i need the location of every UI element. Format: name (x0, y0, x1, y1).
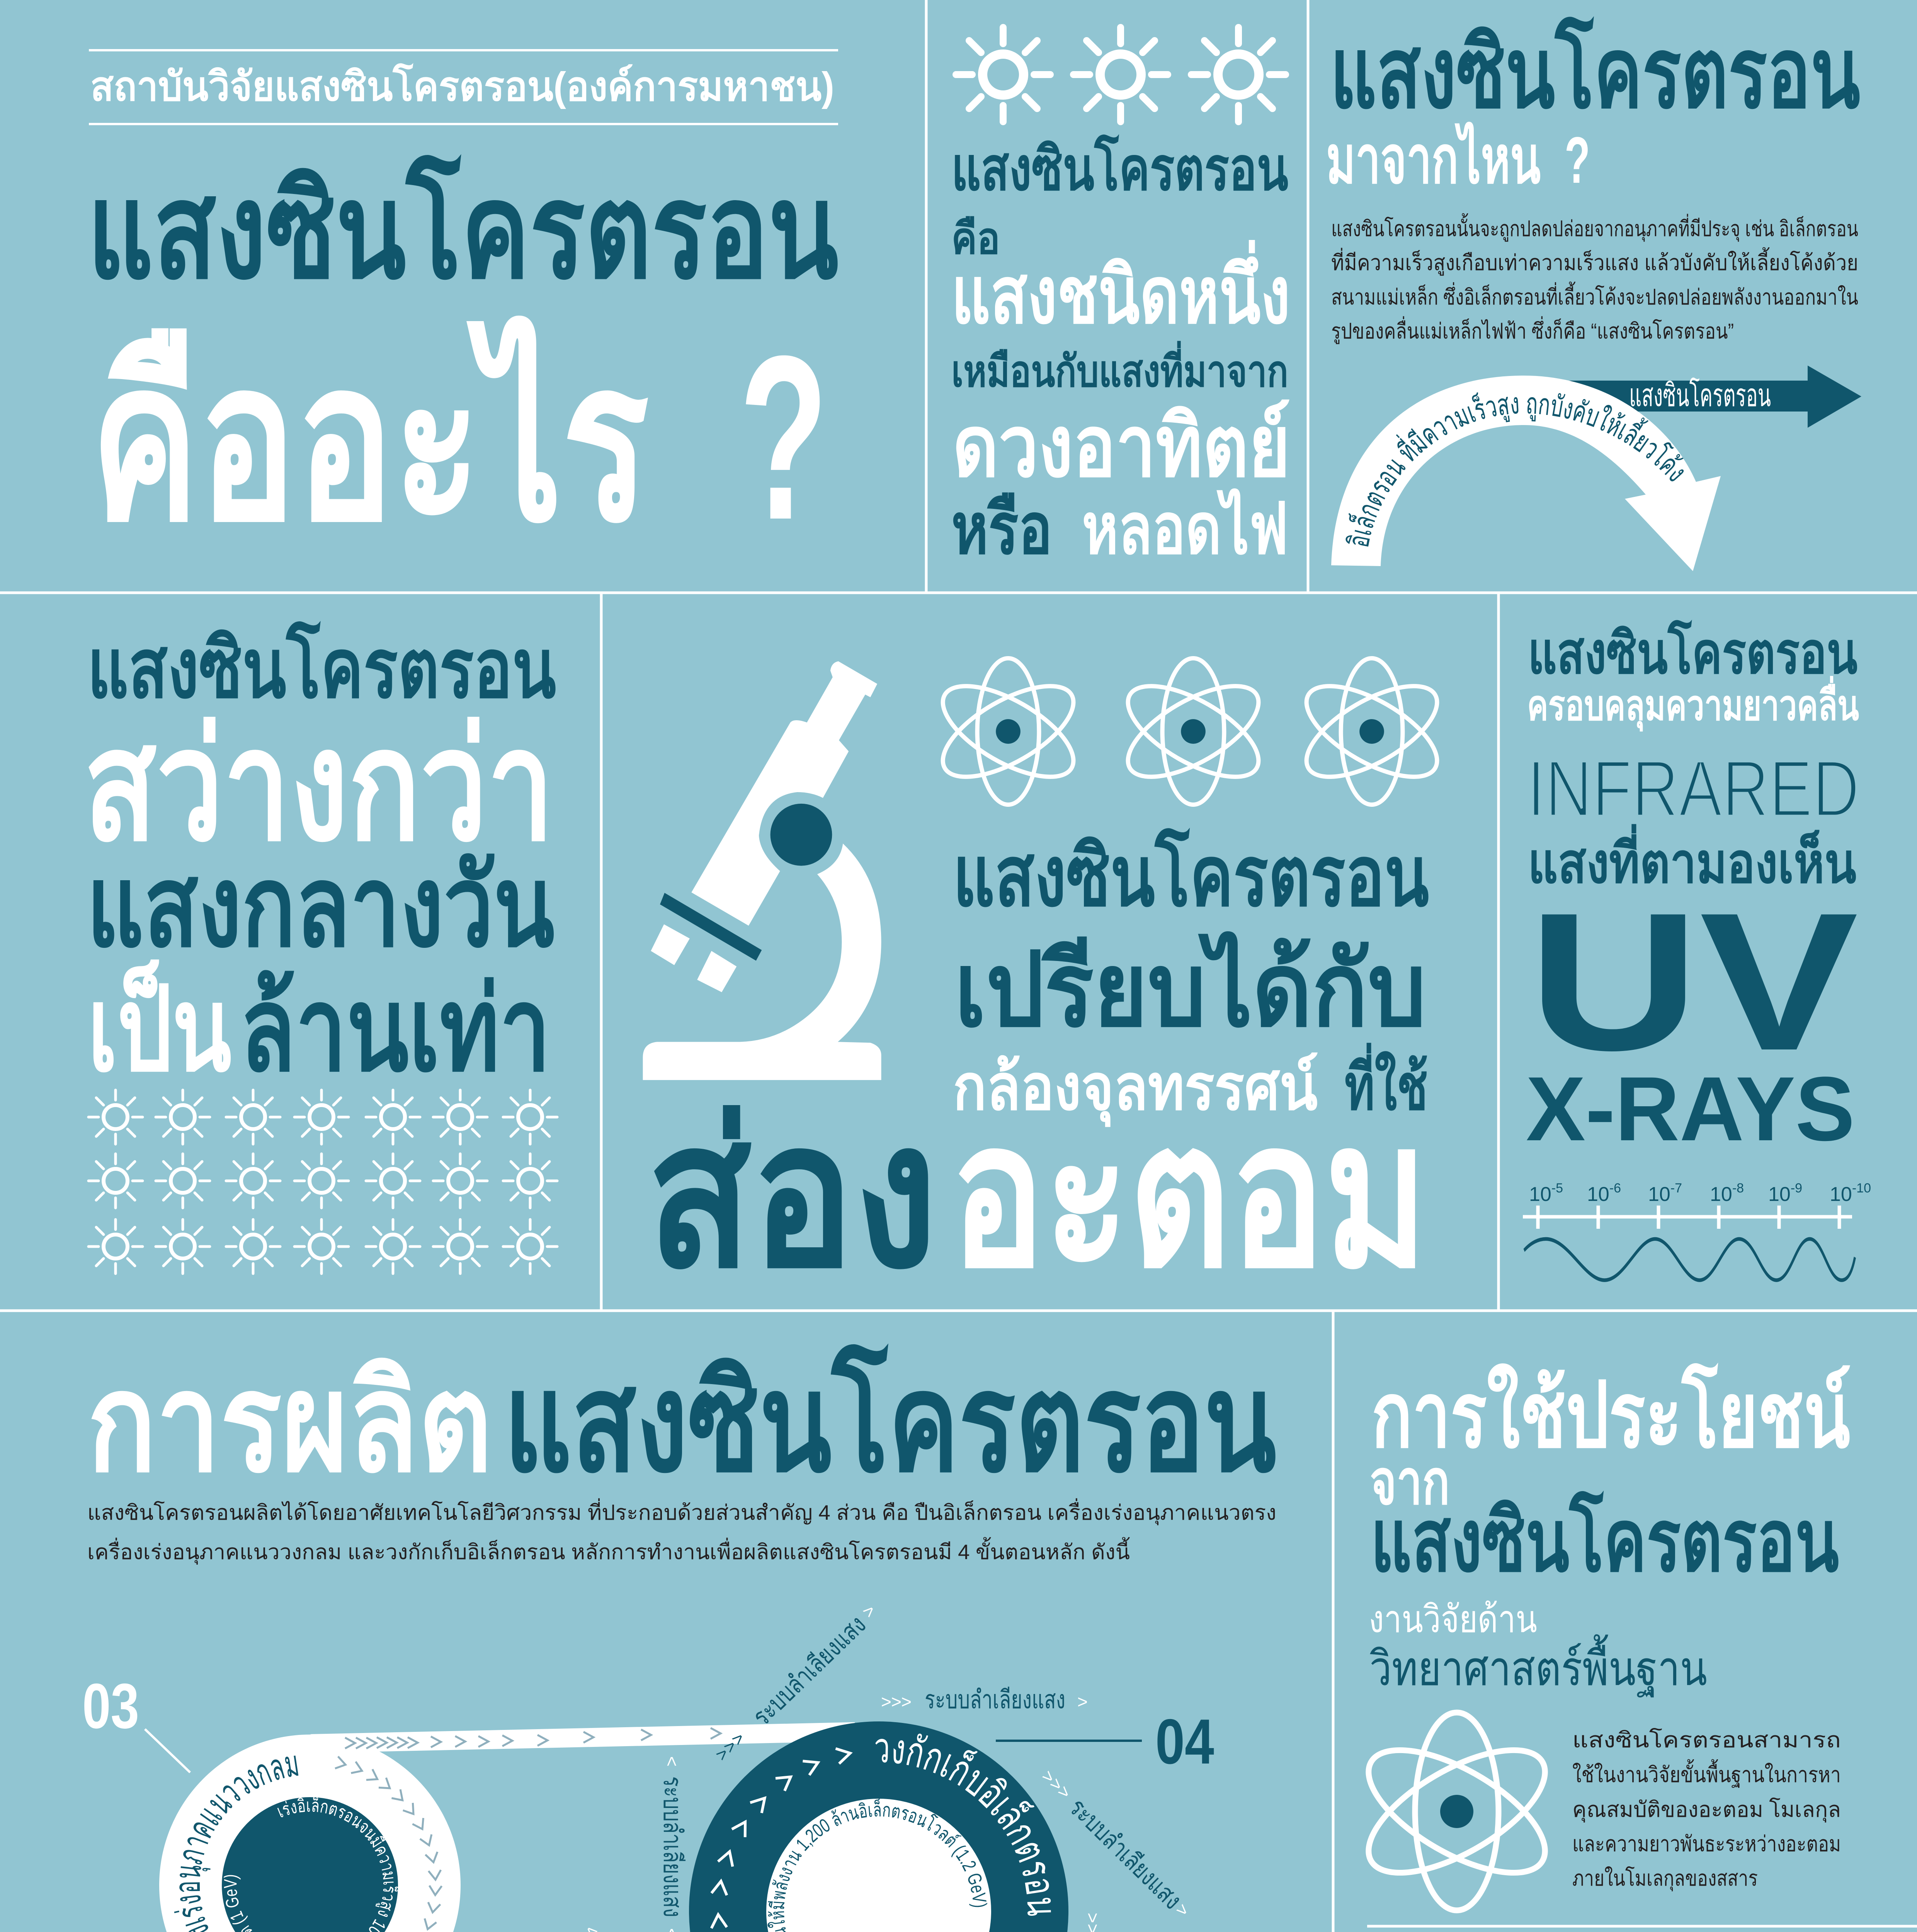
basic science subheading: วิทยาศาสตร์พื้นฐาน (1369, 1634, 1707, 1698)
wave (1524, 1239, 1855, 1280)
definition heading: หรือ (951, 489, 1052, 568)
basic science text: ภายในโมเลกุลของสสาร (1572, 1866, 1758, 1891)
panel: wavelength coverage (1523, 619, 1871, 1280)
wavelength scale labels: -9 (1791, 1181, 1802, 1196)
comparison text: แสงซินโครตรอน (953, 827, 1429, 923)
wavelength scale labels: -5 (1551, 1181, 1563, 1196)
heading lines: ล้านเท่า (240, 964, 551, 1095)
callout 04: 04 (1155, 1706, 1214, 1777)
intro text: แสงซินโครตรอนผลิตได้โดยอาศัยเทคโนโลยีวิศวกรรม ที่ประกอบด้วยส่วนสำคัญ 4 ส่วน คือ ปืนอิเล็กตรอน เครื่องเร่งอนุภาคแนวตรง (87, 1498, 1276, 1526)
title line 2: ? (739, 307, 828, 568)
heading lines: แสงกลางวัน (87, 844, 555, 970)
wavelength scale labels: 10 (1529, 1183, 1551, 1206)
icon: microscope (643, 661, 881, 1080)
section title: การผลิต (87, 1346, 492, 1500)
label: visible light: แสงที่ตามองเห็น (1528, 824, 1856, 895)
comparison text: กล้องจุลทรรศน์ (953, 1052, 1318, 1127)
institute name with rules (89, 50, 838, 124)
intro text (87, 1498, 1276, 1565)
wavelength scale labels (1529, 1181, 1871, 1206)
institute name with rules: สถาบันวิจัยแสงซินโครตรอน(องค์การมหาชน) (90, 63, 834, 109)
beamlines around storage ring: < (662, 1756, 682, 1767)
panel: brighter than daylight (84, 621, 557, 1274)
applications heading (1370, 1362, 1850, 1589)
wavelength scale labels: -8 (1732, 1181, 1744, 1196)
basic science text: แสงซินโครตรอนสามารถ (1572, 1728, 1841, 1752)
definition heading: แสงชนิดหนึ่ง (951, 240, 1290, 340)
panel: main title (87, 50, 839, 568)
beamlines around storage ring: > (1172, 1899, 1194, 1921)
storage ring (689, 1721, 1068, 1932)
comparison text: ที่ใช้ (1345, 1043, 1428, 1123)
basic science text: และความยาวพันธะระหว่างอะตอม (1572, 1832, 1841, 1856)
callout 03 (82, 1670, 190, 1772)
basic science text (1572, 1728, 1841, 1891)
callout 03: 03 (82, 1670, 139, 1742)
panel: production heading (87, 1341, 1277, 1565)
arrow: curved electron path: อิเล็กตรอน ที่มีความเร็วสูง ถูกบังคับให้เลี้ยวโค้ง (1342, 387, 1693, 550)
label: UV: UV (1528, 872, 1859, 1091)
subheading: มาจากไหน (1326, 122, 1541, 197)
body text (1331, 213, 1858, 344)
scale axis (1523, 1206, 1852, 1229)
comparison text: เปรียบได้กับ (954, 930, 1426, 1048)
definition heading: แสงซินโครตรอน (951, 134, 1288, 203)
basic science subheading: งานวิจัยด้าน (1369, 1598, 1537, 1640)
panel: applications (1350, 1362, 1850, 1932)
panel: what is synchrotron light (951, 27, 1290, 568)
heading lines (84, 621, 556, 1095)
label: x-rays: X-RAYS (1526, 1058, 1855, 1160)
title line 2: คืออะไร (90, 314, 649, 566)
beamlines around storage ring: ระบบลำเลียงแสง (925, 1685, 1065, 1714)
beamlines around storage ring: >>> (711, 1728, 748, 1765)
heading lines: แสงซินโครตรอน (87, 621, 556, 715)
comparison text: อะตอม (951, 1082, 1428, 1308)
wavelength scale labels: 10 (1768, 1183, 1791, 1206)
wavelength scale labels: -10 (1852, 1181, 1871, 1196)
wavelength scale labels: 10 (1710, 1183, 1732, 1206)
wavelength scale labels: 10 (1830, 1183, 1852, 1206)
definition heading: หลอดไฟ (1082, 488, 1288, 568)
basic science text: คุณสมบัติของอะตอม โมเลกุล (1572, 1797, 1841, 1823)
beamlines around storage ring: >>> (1038, 1766, 1075, 1803)
icons: three suns (956, 27, 1286, 122)
comparison text (647, 827, 1429, 1308)
subheading: ? (1565, 124, 1590, 197)
body text: ที่มีความเร็วสูงเกือบเท่าความเร็วแสง แล้วบังคับให้เลี้ยงโค้งด้วย (1331, 247, 1858, 276)
wavelength scale labels: -7 (1670, 1181, 1682, 1196)
icons: grid of suns (88, 1090, 557, 1274)
beamlines around storage ring: >>> (881, 1692, 912, 1712)
definition heading: ดวงอาทิตย์ (953, 399, 1290, 495)
arrow: light output: แสงซินโครตรอน (1629, 378, 1771, 413)
headings (1527, 619, 1859, 732)
wavelength scale labels: -6 (1609, 1181, 1621, 1196)
section title: แสงซินโครตรอน (504, 1341, 1277, 1500)
beamlines around storage ring: > (858, 1600, 879, 1622)
applications heading: จาก (1370, 1447, 1450, 1517)
arrow: light output (1565, 366, 1861, 428)
definition heading (951, 134, 1290, 568)
body text: รูปของคลื่นแม่เหล็กไฟฟ้า ซึ่งก็คือ “แสงซินโครตรอน” (1331, 316, 1734, 344)
heading lines: สว่างกว่า (84, 699, 554, 872)
panel: microscope comparison (643, 658, 1451, 1308)
panel: where it comes from (1326, 16, 1861, 571)
basic science subheading (1369, 1598, 1707, 1698)
icons: three atoms (929, 658, 1451, 804)
intro text: เครื่องเร่งอนุภาคแนววงกลม และวงกักเก็บอิเล็กตรอน หลักการทำงานเพื่อผลิตแสงซินโครตรอนมี 4 ขั้นตอนหลัก ดังนี้ (87, 1537, 1130, 1565)
storage ring: วงกักเก็บอิเล็กตรอน (873, 1724, 1066, 1917)
linac: teal L-shaped channel (168, 1919, 445, 1932)
wavelength scale labels: 10 (1587, 1183, 1609, 1206)
heading lines: เป็น (88, 958, 232, 1095)
comparison text: ส่อง (647, 1082, 937, 1308)
diagram: synchrotron machine (82, 1600, 1214, 1932)
basic science text: ใช้ในงานวิจัยขั้นพื้นฐานในการหา (1572, 1759, 1841, 1787)
beamlines around storage ring: > (1077, 1692, 1088, 1712)
beamlines around storage ring (581, 1600, 1194, 1932)
icon: atom (1350, 1713, 1563, 1910)
definition heading: เหมือนกับแสงที่มาจาก (951, 341, 1288, 396)
wavelength scale labels: 10 (1648, 1183, 1670, 1206)
section title (87, 1341, 1277, 1500)
title line 1: แสงซินโครตรอน (87, 152, 839, 306)
definition heading: คือ (951, 214, 1000, 263)
booster ring (159, 1722, 855, 1932)
beamlines around storage ring: ระบบลำเลียงแสง (747, 1610, 871, 1731)
